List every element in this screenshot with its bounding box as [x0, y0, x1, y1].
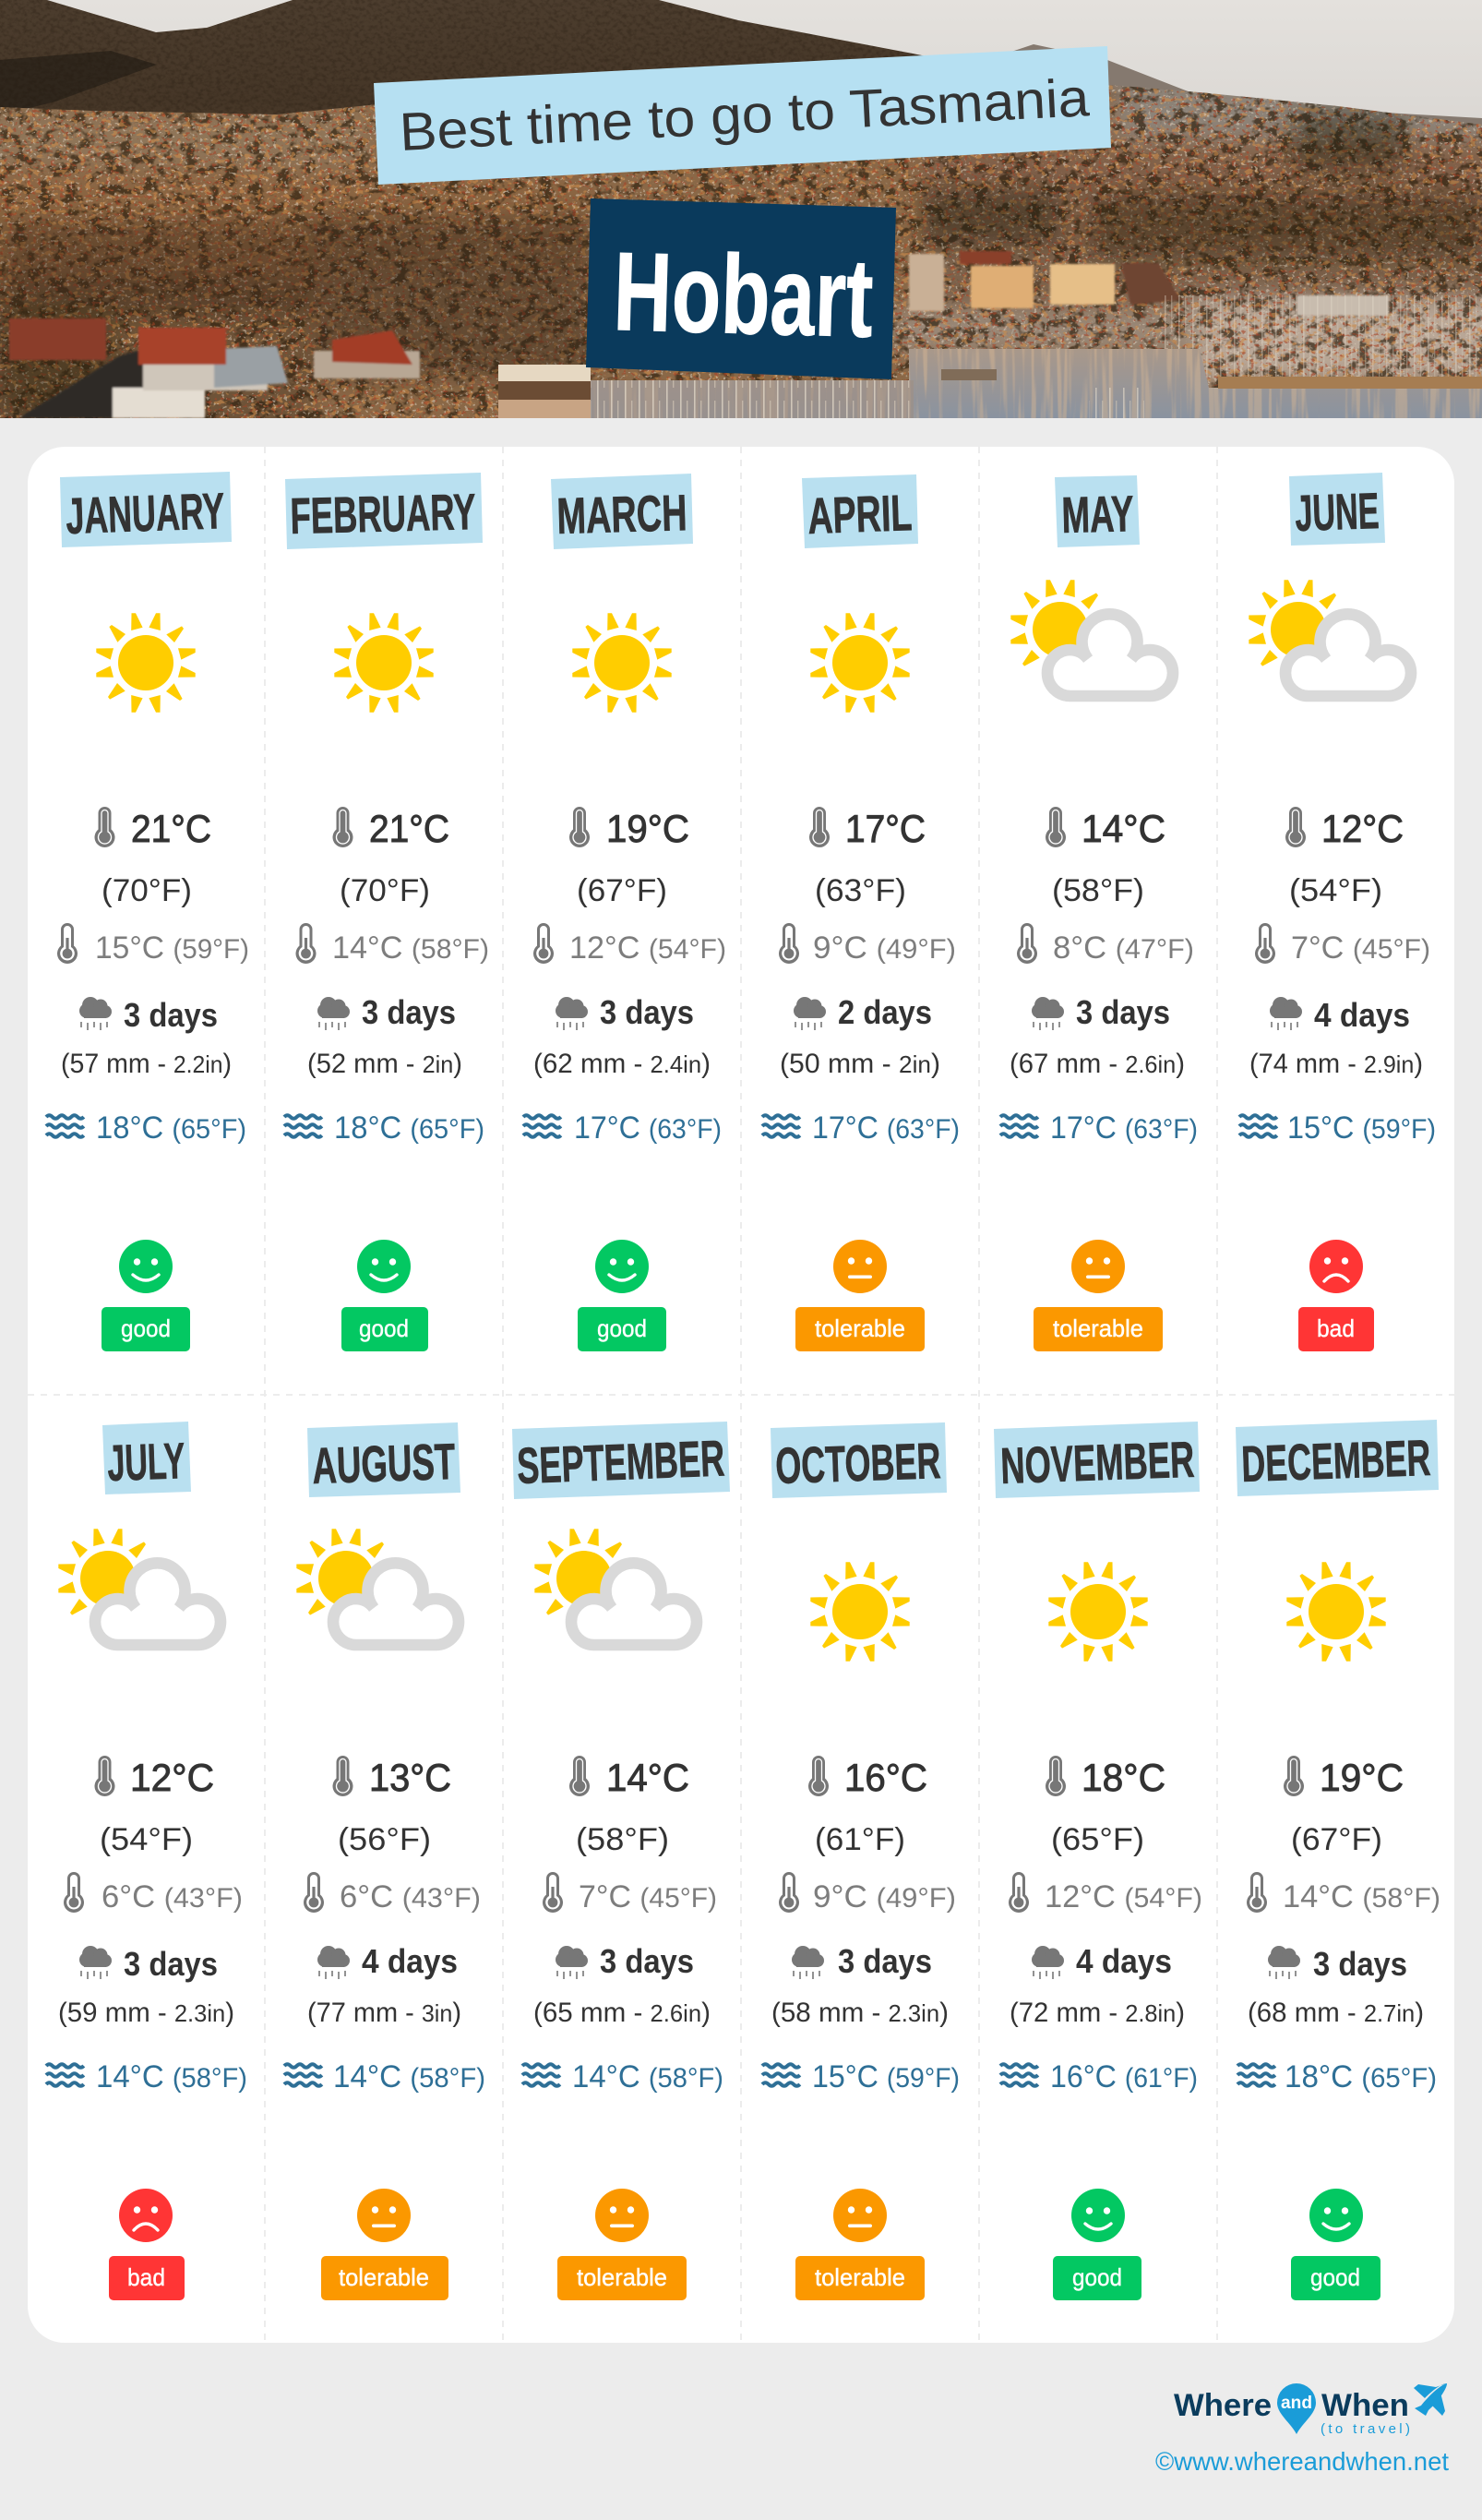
sea temperature: 15°C (59°F) [1287, 1110, 1436, 1146]
high temperature: 17°C [845, 807, 926, 850]
icon: good mood [357, 1240, 411, 1293]
month label [1055, 475, 1140, 547]
icon: thermometer high [808, 1756, 829, 1796]
month label: AUGUST [311, 1433, 456, 1494]
month label: MARCH [556, 484, 687, 545]
month label [802, 474, 918, 548]
high temperature F: (65°F) [1051, 1822, 1144, 1857]
icon: tolerable mood [1071, 1240, 1125, 1293]
icon: good mood [119, 1240, 173, 1293]
rating badge [1053, 2256, 1141, 2300]
high temperature: 14°C [606, 1756, 689, 1799]
rating badge: bad [1317, 1314, 1355, 1342]
panel: May [1000, 475, 1198, 1351]
icon: thermometer low [64, 1872, 84, 1913]
panel: October [762, 1422, 960, 2300]
icon: sea waves [1239, 1115, 1277, 1137]
rain days: 3 days [838, 1942, 932, 1980]
sea temperature: 18°C (65°F) [1285, 2059, 1437, 2094]
rating badge: bad [127, 2263, 165, 2291]
icon: thermometer low [295, 923, 316, 964]
rating badge [102, 1307, 190, 1351]
rain days: 4 days [1314, 996, 1410, 1034]
rainfall: (77 mm - 3in) [307, 1998, 461, 2028]
panel: monthly calendar card [28, 447, 1454, 2343]
low temperature: 8°C (47°F) [1053, 930, 1194, 966]
rainfall: (52 mm - 2in) [307, 1049, 462, 1079]
sea temperature: 14°C (58°F) [333, 2059, 485, 2094]
month label: FEBRUARY [290, 483, 476, 545]
icon: sun [96, 613, 196, 713]
icon: thermometer high [332, 807, 353, 847]
rating badge: good [359, 1314, 409, 1342]
logo: Where and When to travel [1174, 2383, 1447, 2437]
marina masts [1163, 295, 1482, 378]
icon: sea waves [1000, 2064, 1038, 2086]
icon: partly cloudy [1010, 580, 1173, 696]
foreground houses and road [9, 318, 420, 418]
high temperature F: (63°F) [815, 873, 906, 908]
high temperature: 12°C [130, 1756, 214, 1799]
month label: JANUARY [65, 482, 225, 545]
month label [771, 1422, 947, 1498]
icon: rain [1268, 1946, 1300, 1979]
rating badge: tolerable [815, 1314, 905, 1342]
rating badge [578, 1307, 666, 1351]
icon: sea waves [284, 1115, 322, 1137]
rain days: 3 days [124, 1945, 218, 1983]
high temperature F: (61°F) [815, 1822, 905, 1857]
icon: thermometer low [543, 1872, 563, 1913]
rating badge: good [1310, 2263, 1360, 2291]
rating badge: good [597, 1314, 647, 1342]
icon: thermometer high [1046, 1756, 1066, 1796]
high temperature: 21°C [369, 807, 449, 850]
high temperature F: (58°F) [1052, 873, 1144, 908]
high temperature F: (54°F) [100, 1822, 193, 1857]
logo: Where and When to travel: (to travel) [1321, 2421, 1410, 2437]
low temperature: 14°C (58°F) [1283, 1879, 1440, 1914]
low temperature: 7°C (45°F) [1291, 930, 1430, 966]
sea temperature: 18°C (65°F) [96, 1110, 246, 1146]
month label: JUNE [1294, 482, 1380, 542]
icon: sea waves [1237, 2064, 1275, 2086]
panel: March [523, 474, 726, 1351]
icon: sun [572, 613, 672, 713]
icon: sea waves [46, 1115, 84, 1137]
icon: thermometer high [809, 807, 830, 847]
icon: partly cloudy [296, 1529, 459, 1645]
high temperature F: (54°F) [1289, 873, 1382, 908]
card grid dividers [28, 447, 1454, 2343]
month label [60, 472, 232, 547]
rating badge [557, 2256, 687, 2300]
month label [285, 473, 483, 549]
icon: sea waves [523, 1115, 561, 1137]
rain days: 3 days [600, 993, 694, 1031]
icon: thermometer low [1009, 1872, 1029, 1913]
icon: partly cloudy [1249, 580, 1411, 696]
rain days: 3 days [362, 993, 456, 1031]
high temperature: 21°C [131, 807, 211, 850]
icon: rain [79, 997, 112, 1030]
icon: thermometer high [94, 1756, 114, 1796]
sea temperature: 17°C (63°F) [574, 1110, 722, 1146]
low temperature: 6°C (43°F) [340, 1879, 481, 1914]
month label: NOVEMBER [999, 1431, 1195, 1494]
icon: plane [1414, 2383, 1447, 2416]
rain days: 4 days [362, 1942, 458, 1980]
icon: sun [810, 613, 910, 713]
panel: January [46, 472, 249, 1351]
rating badge [795, 1307, 925, 1351]
rating badge [795, 2256, 925, 2300]
icon: sea waves [46, 2064, 84, 2086]
icon: rain [1032, 1946, 1064, 1979]
rainfall: (68 mm - 2.7in) [1248, 1998, 1424, 2028]
month label [994, 1422, 1200, 1498]
month label: APRIL [807, 484, 913, 545]
icon: thermometer low [779, 923, 799, 964]
high temperature F: (67°F) [1291, 1822, 1382, 1857]
sea temperature: 15°C (59°F) [812, 2059, 960, 2094]
rainfall: (57 mm - 2.2in) [61, 1049, 232, 1079]
sea temperature: 14°C (58°F) [96, 2059, 247, 2094]
rating badge: good [1072, 2263, 1122, 2291]
panel: July [46, 1422, 247, 2300]
city banner: Hobart: Hobart [612, 228, 875, 361]
month label [307, 1422, 460, 1497]
logo: Where and When to travel: When [1321, 2388, 1409, 2423]
icon: tolerable mood [833, 2189, 887, 2242]
rating badge [1291, 2256, 1380, 2300]
icon: thermometer high [1046, 807, 1066, 847]
sea temperature: 18°C (65°F) [334, 1110, 484, 1146]
waterfront buildings [909, 251, 1389, 316]
low temperature: 12°C (54°F) [569, 930, 726, 966]
rainfall: (59 mm - 2.3in) [58, 1998, 234, 2028]
rainfall: (50 mm - 2in) [780, 1049, 940, 1079]
panel: August [284, 1422, 485, 2300]
icon: thermometer low [304, 1872, 324, 1913]
icon: rain [556, 997, 588, 1030]
icon: partly cloudy [534, 1529, 697, 1645]
rating badge [109, 2256, 185, 2300]
high temperature F: (67°F) [577, 873, 667, 908]
rating badge: tolerable [1053, 1314, 1143, 1342]
icon: good mood [1309, 2189, 1363, 2242]
rain days: 4 days [1076, 1942, 1172, 1980]
icon: rain [794, 997, 826, 1030]
icon: good mood [595, 1240, 649, 1293]
sea temperature: 17°C (63°F) [1050, 1110, 1198, 1146]
icon: sea waves [762, 2064, 800, 2086]
month label: JULY [106, 1432, 185, 1492]
month label: MAY [1061, 485, 1134, 544]
low temperature: 9°C (49°F) [813, 930, 956, 966]
low temperature: 9°C (49°F) [813, 1879, 956, 1914]
logo: Where and When to travel: Where [1174, 2388, 1272, 2423]
month label [1289, 473, 1385, 546]
high temperature: 19°C [606, 807, 689, 850]
icon: rain [79, 1946, 112, 1979]
rain days: 3 days [1076, 993, 1170, 1031]
rating badge: tolerable [577, 2263, 667, 2291]
rain days: 3 days [1313, 1945, 1407, 1983]
rainfall: (74 mm - 2.9in) [1249, 1049, 1423, 1079]
sea temperature: 17°C (63°F) [812, 1110, 960, 1146]
high temperature F: (70°F) [102, 873, 192, 908]
high temperature: 16°C [844, 1756, 927, 1799]
rainfall: (67 mm - 2.6in) [1010, 1049, 1185, 1079]
panel: September [512, 1422, 730, 2300]
rating badge: tolerable [339, 2263, 429, 2291]
rating badge [321, 2256, 448, 2300]
icon: sea waves [762, 1115, 800, 1137]
low temperature: 15°C (59°F) [95, 930, 249, 966]
rating badge: tolerable [815, 2263, 905, 2291]
month label [102, 1422, 191, 1494]
rainfall: (72 mm - 2.8in) [1010, 1998, 1185, 2028]
icon: thermometer high [569, 1756, 590, 1796]
sea temperature: 16°C (61°F) [1050, 2059, 1198, 2094]
icon: sun [1048, 1562, 1148, 1662]
icon: thermometer high [94, 807, 114, 847]
icon: thermometer low [1247, 1872, 1267, 1913]
low temperature: 7°C (45°F) [579, 1879, 717, 1914]
rating badge [341, 1307, 428, 1351]
icon: bad mood [1309, 1240, 1363, 1293]
high temperature F: (70°F) [340, 873, 430, 908]
icon: thermometer low [1255, 923, 1275, 964]
icon: thermometer high [1285, 807, 1306, 847]
high temperature: 14°C [1082, 807, 1165, 850]
month label [551, 474, 693, 549]
harbour water [498, 349, 1482, 418]
low temperature: 12°C (54°F) [1045, 1879, 1202, 1914]
low temperature: 14°C (58°F) [332, 930, 489, 966]
month label: OCTOBER [774, 1432, 941, 1494]
icon: thermometer high [569, 807, 590, 847]
header photo: Hobart town, hills and marina [0, 0, 1482, 443]
rainfall: (58 mm - 2.3in) [771, 1998, 949, 2028]
rain days: 2 days [838, 993, 932, 1031]
rainfall: (65 mm - 2.6in) [533, 1998, 711, 2028]
icon: rain [1032, 997, 1064, 1030]
rain days: 3 days [124, 996, 218, 1034]
icon: sea waves [522, 2064, 560, 2086]
high temperature: 12°C [1321, 807, 1404, 850]
icon: sun [334, 613, 434, 713]
icon: tolerable mood [595, 2189, 649, 2242]
icon: thermometer low [1017, 923, 1037, 964]
icon: rain [1270, 997, 1302, 1030]
high temperature F: (58°F) [576, 1822, 669, 1857]
icon: sun [810, 1562, 910, 1662]
month label [512, 1422, 730, 1499]
panel: June [1239, 473, 1436, 1351]
icon: thermometer low [779, 1872, 799, 1913]
panel: December [1236, 1420, 1440, 2300]
low temperature: 6°C (43°F) [102, 1879, 243, 1914]
panel: November [994, 1422, 1202, 2300]
month label: SEPTEMBER [516, 1429, 725, 1494]
icon: good mood [1071, 2189, 1125, 2242]
icon: rain [556, 1946, 588, 1979]
icon: rain [792, 1946, 824, 1979]
icon: map pin: and [1281, 2394, 1312, 2413]
rating badge [1298, 1307, 1374, 1351]
high temperature: 13°C [369, 1756, 451, 1799]
icon: tolerable mood [833, 1240, 887, 1293]
rainfall: (62 mm - 2.4in) [533, 1049, 711, 1079]
rating badge: good [121, 1314, 171, 1342]
high temperature F: (56°F) [338, 1822, 431, 1857]
icon: thermometer low [57, 923, 78, 964]
sea temperature: 14°C (58°F) [572, 2059, 723, 2094]
high temperature: 19°C [1320, 1756, 1404, 1799]
icon: thermometer high [332, 1756, 353, 1796]
title banner: Best time to go to Tasmania [398, 67, 1091, 162]
icon: tolerable mood [357, 2189, 411, 2242]
icon: map pin [1277, 2383, 1316, 2434]
icon: thermometer low [533, 923, 554, 964]
website credit: ©www.whereandwhen.net [1155, 2447, 1449, 2476]
title banner [374, 46, 1111, 185]
icon: thermometer high [1284, 1756, 1304, 1796]
panel: April [762, 474, 960, 1351]
icon: sun [1286, 1562, 1386, 1662]
city banner: Hobart [586, 198, 896, 379]
icon: rain [317, 997, 350, 1030]
icon: rain [317, 1946, 350, 1979]
rain days: 3 days [600, 1942, 694, 1980]
icon: sea waves [284, 2064, 322, 2086]
panel: February [284, 473, 489, 1351]
icon: sea waves [1000, 1115, 1038, 1137]
icon: bad mood [119, 2189, 173, 2242]
icon: partly cloudy [58, 1529, 221, 1645]
high temperature: 18°C [1082, 1756, 1165, 1799]
rating badge [1034, 1307, 1163, 1351]
